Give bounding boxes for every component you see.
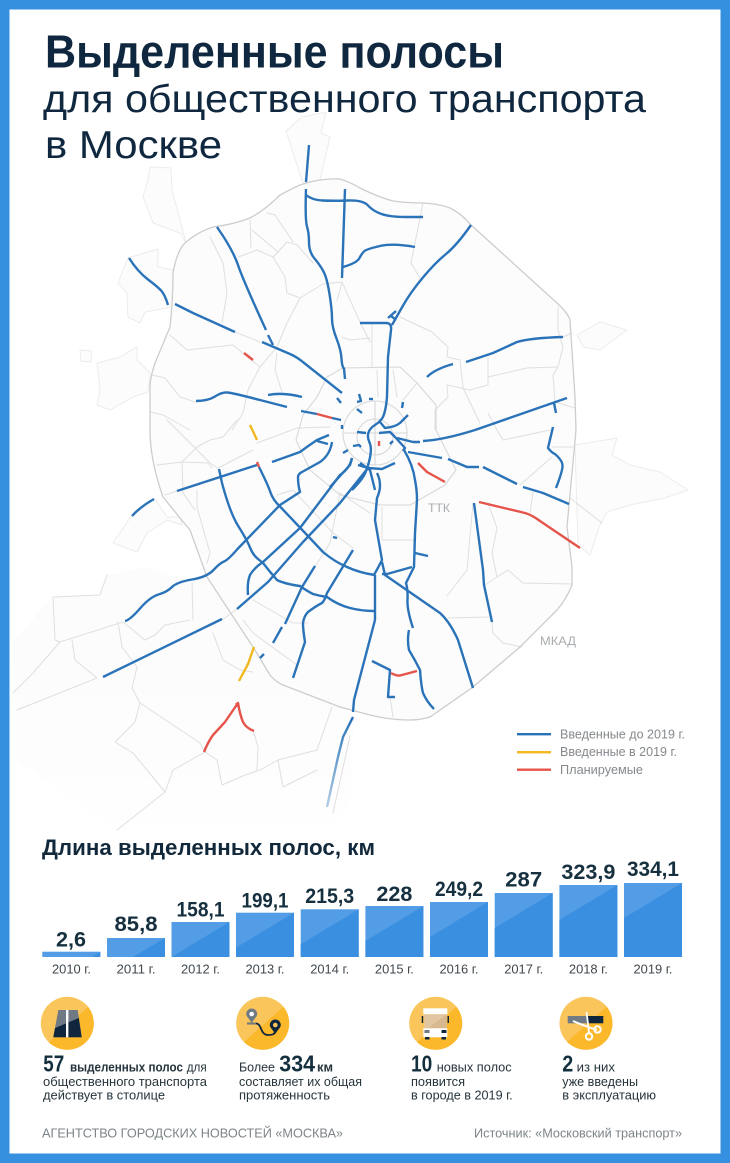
legend: Введенные в 2019 г. [560, 745, 677, 759]
map backdrop: city inside MKAD [150, 179, 576, 720]
bar 2018 [559, 861, 617, 976]
stat: 57 lanes: действует в столице [43, 1088, 165, 1102]
bar 2018: 323,9 [561, 861, 615, 884]
label: MKAD: МКАД [540, 634, 576, 648]
title: для общественного транспорта [43, 78, 646, 121]
bar 2019: 2019 г. [634, 961, 672, 976]
bar 2013: 199,1 [242, 890, 289, 913]
stat: 10 new lanes: 10 [411, 1051, 432, 1077]
bar 2015 [365, 883, 423, 976]
bar 2011 [107, 913, 165, 976]
icon: scissors and ribbon [558, 997, 614, 1050]
label: TTK: ТТК [428, 501, 450, 515]
bar 2010: 2,6 [56, 929, 86, 952]
stat: 10 new lanes [408, 997, 513, 1102]
stat: 57 lanes [40, 997, 208, 1102]
stat: 10 new lanes: появится [411, 1074, 465, 1089]
stat: 57 lanes: выделенных полос [70, 1060, 183, 1075]
stat: 334 km: протяженность [239, 1088, 330, 1102]
bar 2016 [430, 878, 488, 976]
title: в Москве [45, 124, 222, 167]
bar 2010 [42, 929, 100, 976]
stat: 57 lanes: для [187, 1060, 207, 1075]
bar 2011: 85,8 [114, 913, 158, 936]
bar 2014: 215,3 [305, 885, 354, 908]
secondary roads [13, 203, 602, 830]
bar 2018: 2018 г. [569, 961, 608, 976]
bar 2013: 2013 г. [246, 961, 284, 976]
stat: 334 km: км [317, 1060, 333, 1075]
bar 2017 [495, 869, 553, 976]
bar 2017: 2017 г. [504, 961, 543, 976]
bar 2019 [624, 858, 682, 976]
existing bus lanes [103, 145, 569, 712]
stat: 57 lanes: общественного транспорта [43, 1074, 208, 1089]
stat: 2 already opened: 2 [562, 1051, 573, 1077]
icon: route pins [235, 997, 291, 1050]
stat: 334 km: 334 [279, 1051, 315, 1077]
bar 2016: 249,2 [435, 878, 483, 901]
bar 2014: 2014 г. [310, 961, 349, 976]
stat: 334 km [235, 997, 362, 1102]
bar chart [42, 858, 682, 976]
stat: 334 km: составляет их общая [239, 1074, 362, 1089]
map of Moscow [13, 112, 688, 832]
bar 2015: 2015 г. [375, 961, 414, 976]
map backdrop: outlying districts [14, 112, 688, 832]
stat: 10 new lanes: в городе в 2019 г. [411, 1088, 513, 1102]
bar 2019: 334,1 [627, 858, 679, 881]
MKAD ring [150, 179, 576, 720]
bar 2010: 2010 г. [52, 961, 91, 976]
stat: 2 already opened: уже введены [562, 1074, 638, 1089]
bar 2012: 158,1 [176, 899, 225, 922]
title [43, 26, 646, 167]
bar 2016: 2016 г. [440, 961, 478, 976]
stat: 2 already opened: в эксплуатацию [562, 1088, 656, 1102]
stat: 10 new lanes: новых полос [437, 1060, 512, 1075]
stat: 334 km: Более [239, 1060, 275, 1075]
legend [517, 728, 685, 777]
stat: 2 already opened [558, 997, 656, 1102]
bar 2012 [172, 899, 230, 976]
stat: 2 already opened: из них [577, 1060, 616, 1075]
bar 2017: 287 [505, 869, 542, 892]
title: Выделенные полосы [45, 26, 504, 78]
lanes opened in 2019 [239, 425, 257, 681]
existing lane fading past MKAD [327, 717, 353, 807]
bar 2011: 2011 г. [116, 961, 156, 976]
footer: agency: АГЕНТСТВО ГОРОДСКИХ НОВОСТЕЙ «МОСКВА» [42, 1126, 343, 1140]
icon: road [40, 997, 96, 1050]
planned lanes [204, 353, 580, 752]
Third Transport Ring and city rings [296, 367, 456, 505]
icon: bus [408, 997, 464, 1050]
legend: Введенные до 2019 г. [560, 728, 685, 742]
bar 2014 [301, 885, 359, 976]
footer: source: Источник: «Московский транспорт» [474, 1126, 682, 1140]
bar 2013 [236, 890, 294, 976]
legend: Планируемые [560, 763, 643, 777]
chart heading: Длина выделенных полос, км [42, 835, 375, 860]
stat: 57 lanes: 57 [43, 1051, 64, 1077]
bar 2012: 2012 г. [181, 961, 220, 976]
bar 2015: 228 [376, 883, 413, 906]
